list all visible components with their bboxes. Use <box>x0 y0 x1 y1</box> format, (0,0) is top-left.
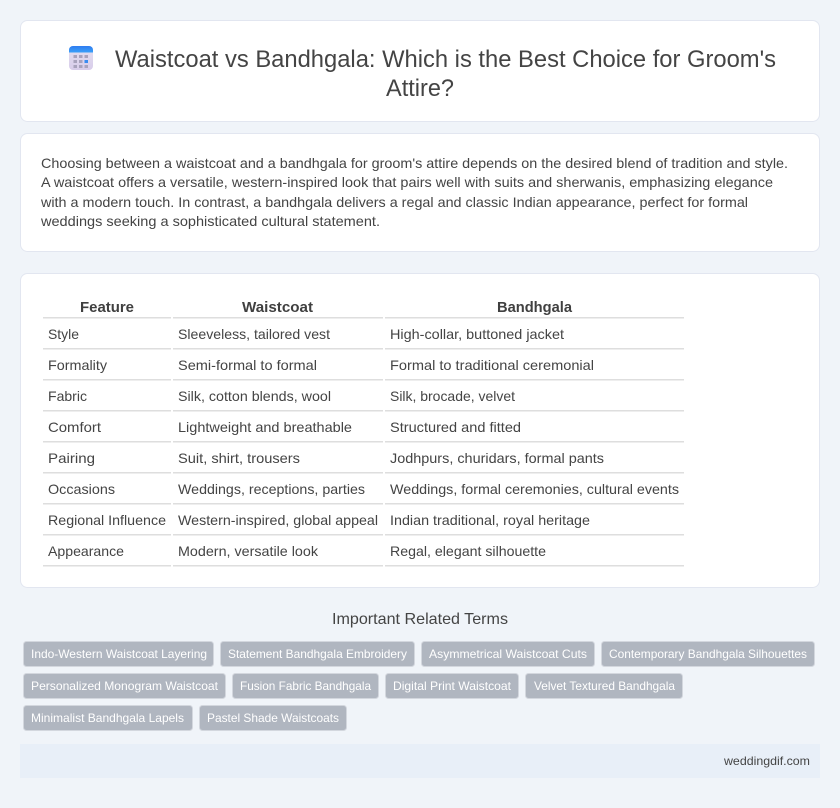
row: regional influence: Regional Influence <box>48 512 166 528</box>
row: style: High-collar, buttoned jacket <box>390 326 564 342</box>
title: Attire? <box>386 75 454 102</box>
row: formality <box>48 357 594 373</box>
row: appearance <box>48 543 546 559</box>
text block: introduction paragraph: with a modern touch. In contrast, a bandhgala delivers a regal and classic Indian appearance, perfect for formal <box>40 194 748 210</box>
table header <box>80 300 573 316</box>
text block: introduction paragraph: weddings seeking a sophisticated cultural statement. <box>40 213 380 229</box>
text block: introduction paragraph: Choosing between a waistcoat and a bandhgala for groom's attire depends on the desired blend of tradition and style. <box>41 155 788 171</box>
row: pairing: Jodhpurs, churidars, formal pants <box>390 450 604 466</box>
row: fabric <box>48 388 515 404</box>
tag <box>200 706 346 730</box>
tag: Contemporary Bandhgala Silhouettes <box>609 647 807 661</box>
row: pairing: Suit, shirt, trousers <box>178 450 300 466</box>
row: occasions: Occasions <box>48 481 115 497</box>
tag: Statement Bandhgala Embroidery <box>228 647 407 661</box>
row: regional influence <box>48 512 590 528</box>
row: appearance: Regal, elegant silhouette <box>390 543 546 559</box>
tag: Digital Print Waistcoat <box>393 679 512 693</box>
row: occasions <box>48 481 679 497</box>
row: comfort <box>48 419 521 435</box>
row: appearance: Appearance <box>48 543 124 559</box>
row: formality: Formal to traditional ceremonial <box>390 357 594 373</box>
row: formality: Formality <box>48 357 107 373</box>
tag: Minimalist Bandhgala Lapels <box>31 711 184 725</box>
panel: introduction <box>20 134 820 252</box>
table header: Waistcoat <box>242 300 313 316</box>
heading: important related terms: Important Related Terms <box>332 611 508 628</box>
tag <box>422 642 594 666</box>
row: pairing: Pairing <box>48 450 95 466</box>
footer: weddingdif.com <box>723 754 810 768</box>
icon: calendar <box>69 46 93 70</box>
row: comfort: Structured and fitted <box>390 419 521 435</box>
tag: Velvet Textured Bandhgala <box>534 679 675 693</box>
row: fabric: Silk, cotton blends, wool <box>178 388 331 404</box>
tag <box>220 642 414 666</box>
row: fabric: Silk, brocade, velvet <box>390 388 515 404</box>
row: style <box>48 326 564 342</box>
table header: Feature <box>80 300 134 316</box>
tag <box>24 706 192 730</box>
title <box>115 46 776 102</box>
row: occasions: Weddings, receptions, parties <box>178 481 365 497</box>
row: regional influence: Western-inspired, global appeal <box>178 512 378 528</box>
tag: Fusion Fabric Bandhgala <box>240 679 371 693</box>
row: comfort: Comfort <box>48 419 101 435</box>
row: comfort: Lightweight and breathable <box>178 419 352 435</box>
row: appearance: Modern, versatile look <box>178 543 319 559</box>
tag <box>24 674 226 698</box>
row: style: Style <box>48 326 79 342</box>
tag: Asymmetrical Waistcoat Cuts <box>429 647 587 661</box>
panel: header <box>20 20 820 122</box>
tag: Pastel Shade Waistcoats <box>207 711 339 725</box>
tag <box>386 674 518 698</box>
tag <box>526 674 682 698</box>
row: regional influence: Indian traditional, royal heritage <box>390 512 590 528</box>
footer <box>20 744 820 778</box>
row: fabric: Fabric <box>48 388 87 404</box>
tag <box>24 642 214 666</box>
tag <box>232 674 378 698</box>
text block: introduction paragraph <box>40 155 788 229</box>
row: pairing <box>48 450 604 466</box>
panel: comparison table <box>20 274 820 588</box>
table header: Bandhgala <box>497 300 573 316</box>
tag <box>602 642 814 666</box>
text block: introduction paragraph: A waistcoat offers a versatile, western-inspired look that pairs well with suits and sherwanis, emphasizing elegance <box>41 174 773 190</box>
related term tags <box>24 642 814 730</box>
title: Waistcoat vs Bandhgala: Which is the Best Choice for Groom's <box>115 46 776 73</box>
tag: Indo-Western Waistcoat Layering <box>31 647 207 661</box>
row: occasions: Weddings, formal ceremonies, cultural events <box>390 481 679 497</box>
tag: Personalized Monogram Waistcoat <box>31 679 219 693</box>
row: formality: Semi-formal to formal <box>178 357 317 373</box>
row: style: Sleeveless, tailored vest <box>178 326 330 342</box>
